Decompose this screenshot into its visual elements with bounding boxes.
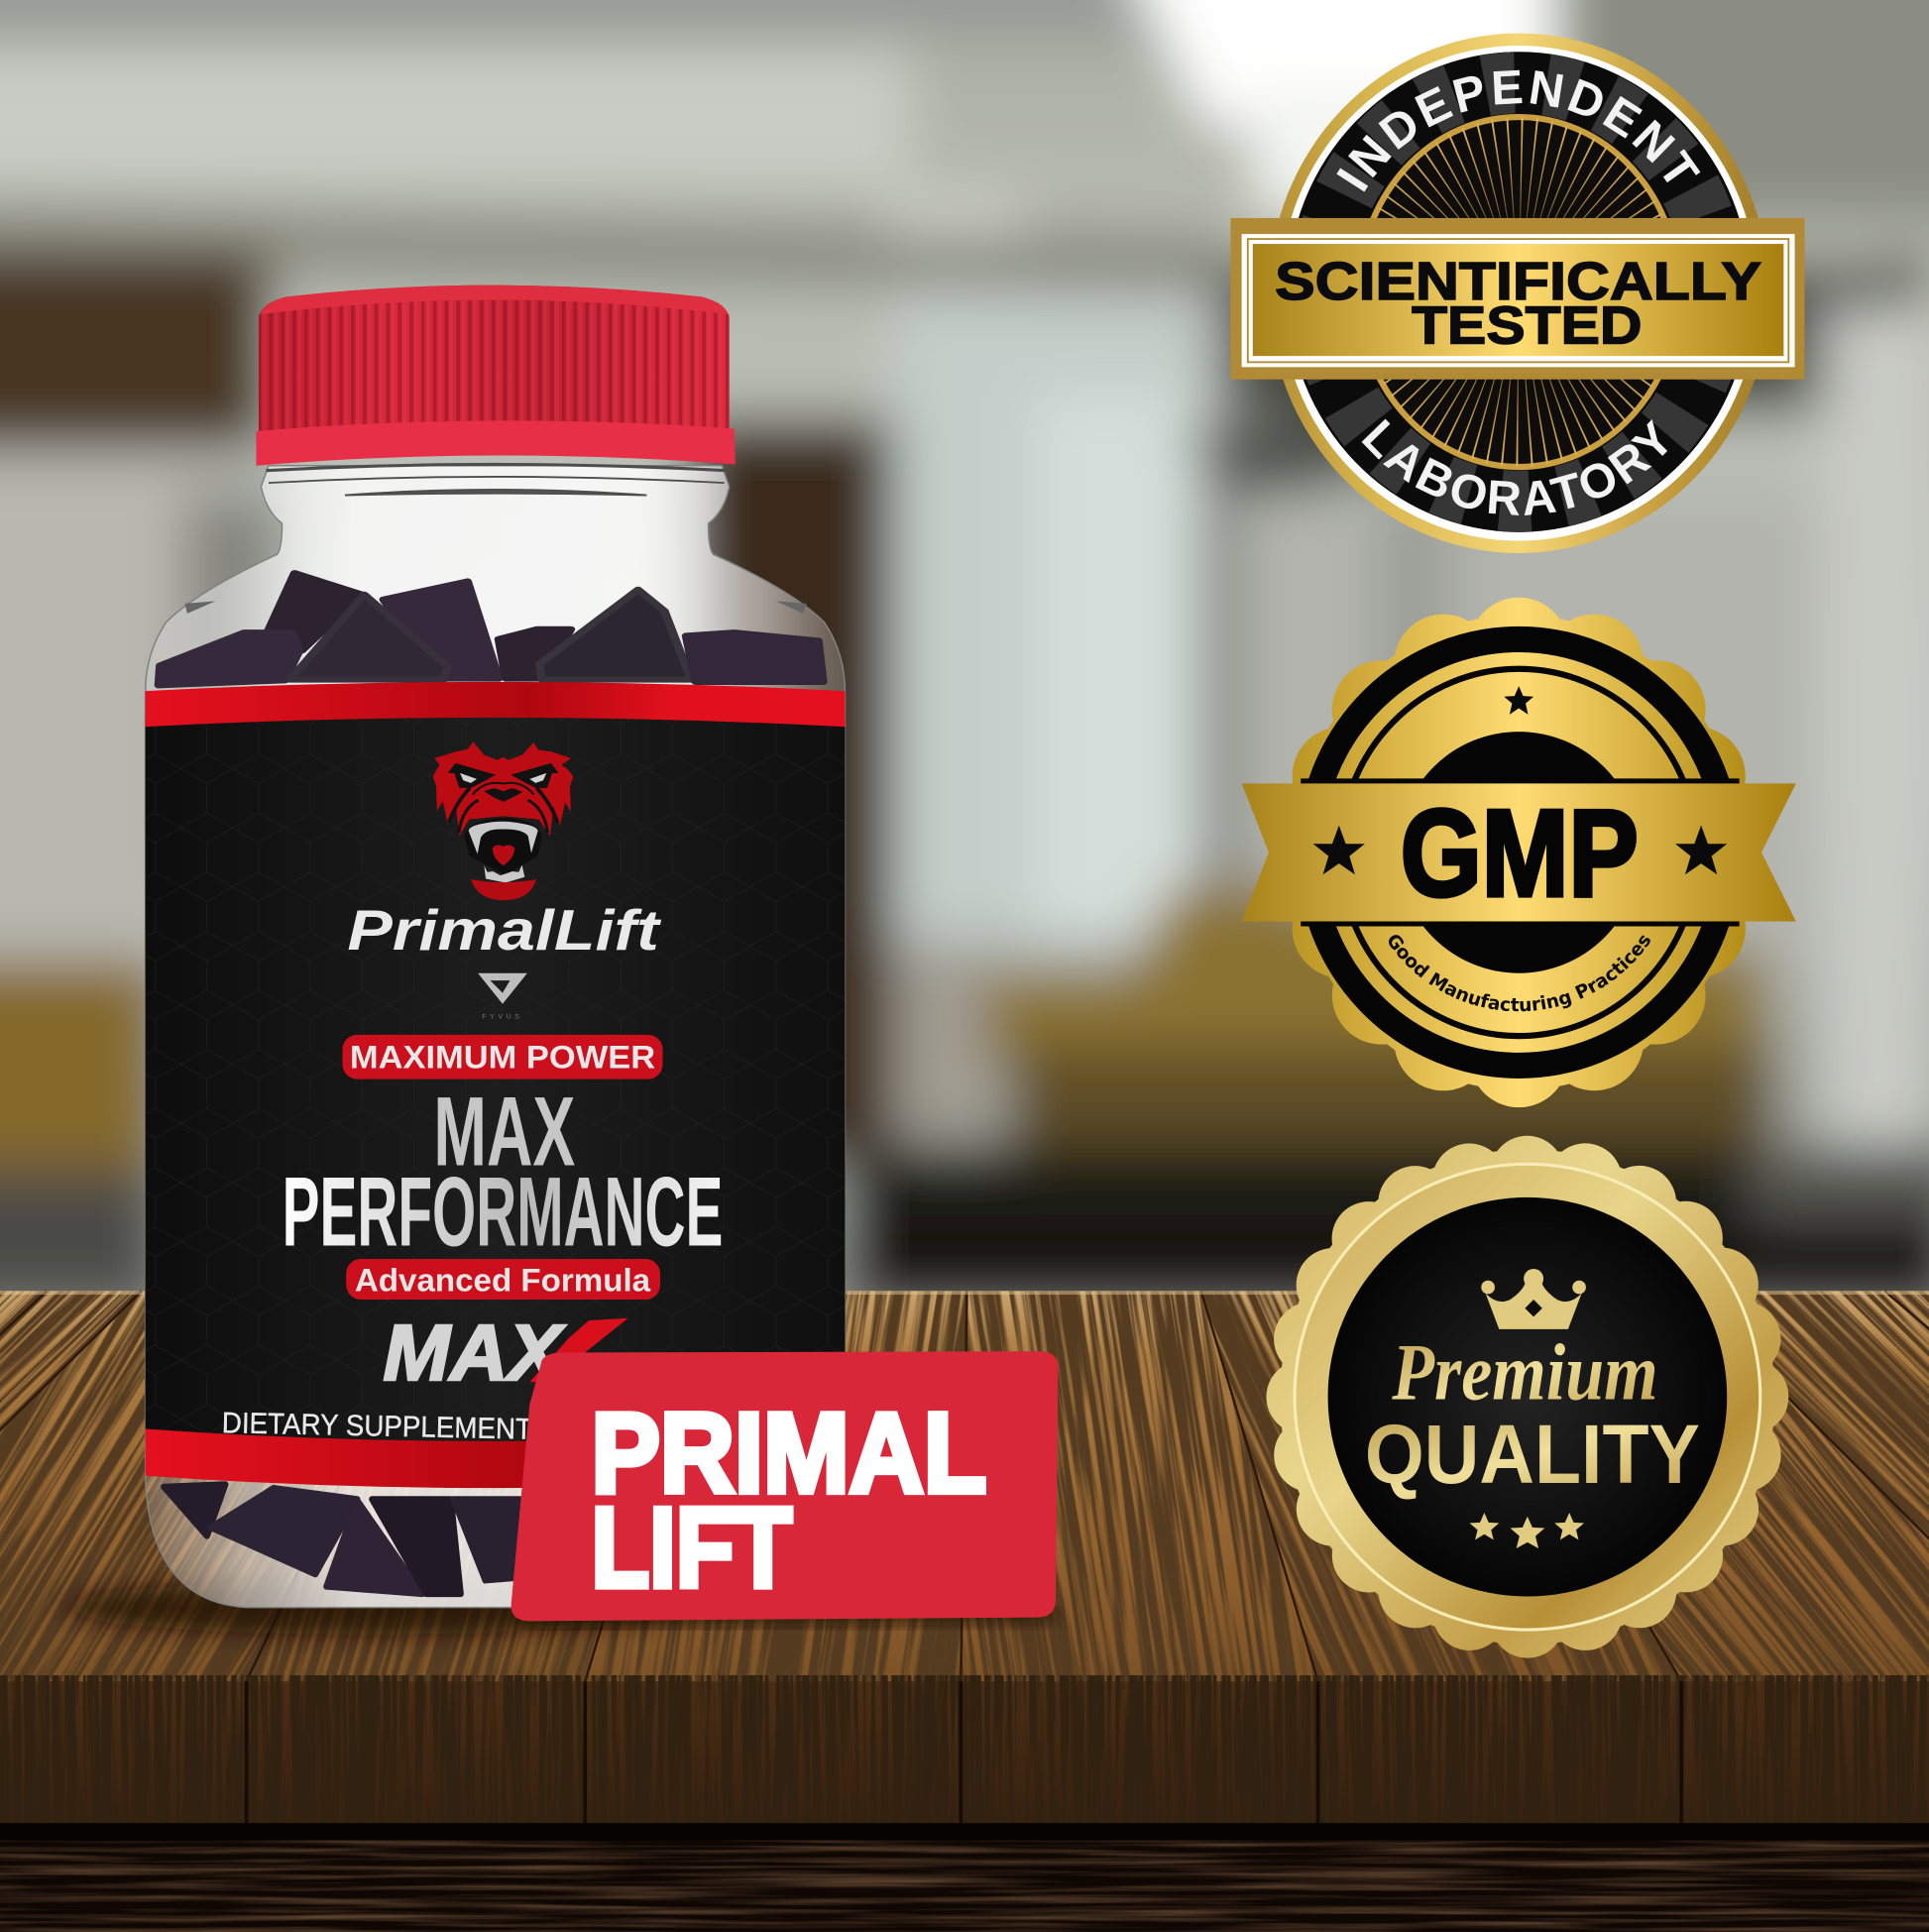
maker emblem bbox=[478, 973, 527, 1021]
curved text: good manufacturing practices: Good Manufacturing Practices bbox=[1389, 935, 1650, 1011]
ribbon bbox=[1242, 778, 1796, 926]
badge: scientifically tested bbox=[1230, 34, 1804, 553]
badge: premium quality bbox=[1280, 1149, 1775, 1645]
glass jar bbox=[146, 466, 845, 1608]
product title bbox=[283, 1078, 723, 1267]
gold banner bbox=[1230, 218, 1804, 380]
product title: PERFORMANCE bbox=[283, 1157, 723, 1267]
curved text: independent: INDEPENDENT bbox=[1336, 69, 1701, 192]
center black disc bbox=[1398, 732, 1640, 973]
tag shadow bbox=[517, 1608, 1057, 1629]
scalloped gold seal bbox=[1296, 615, 1742, 1090]
outer gold ring bbox=[1269, 34, 1768, 553]
gold ring bbox=[1295, 1164, 1760, 1630]
maximum power pill: MAXIMUM POWER bbox=[350, 1039, 655, 1075]
gorilla logo bbox=[433, 741, 573, 900]
gold banner: SCIENTIFICALLY bbox=[1275, 253, 1761, 311]
black rings bbox=[1309, 639, 1728, 1066]
blurred room background bbox=[0, 0, 1929, 1318]
product title: MAX bbox=[433, 1078, 575, 1188]
max logo: MAX bbox=[383, 1308, 566, 1397]
dietary supplement line: DIETARY SUPPLEMENT bbox=[222, 1407, 532, 1446]
premium script: Premium bbox=[1391, 1327, 1658, 1418]
gummies bottom bbox=[164, 1484, 523, 1594]
star: top bbox=[1504, 686, 1533, 715]
red primal lift tag: PRIMAL bbox=[591, 1391, 986, 1517]
product bottle bbox=[146, 285, 845, 1608]
scalloped gold seal bbox=[1280, 1149, 1775, 1645]
black segmented ring bbox=[1288, 52, 1751, 532]
quality: QUALITY bbox=[1365, 1408, 1700, 1501]
red primal lift tag bbox=[511, 1351, 1058, 1621]
red band top bbox=[146, 682, 845, 727]
advanced formula pill: Advanced Formula bbox=[355, 1262, 651, 1298]
neck glass reflections bbox=[184, 464, 807, 614]
inner sunburst bbox=[1359, 117, 1679, 467]
wooden table bbox=[0, 1281, 1929, 1932]
red band bottom bbox=[146, 1428, 845, 1488]
crown icon bbox=[1481, 1269, 1586, 1329]
curved text: laboratory: LABORATORY bbox=[1362, 418, 1667, 515]
ribbon: GMP bbox=[1401, 785, 1639, 922]
brand name: PrimalLift bbox=[347, 899, 661, 963]
badge: GMP bbox=[1241, 597, 1796, 1108]
black center bbox=[1328, 1197, 1727, 1596]
black label bbox=[146, 706, 845, 1453]
gold banner: TESTED bbox=[1412, 297, 1642, 356]
maker emblem: FYVUS bbox=[482, 1014, 523, 1021]
red cap bbox=[256, 285, 736, 466]
red primal lift tag: LIFT bbox=[591, 1486, 792, 1612]
bottle shadow on table bbox=[61, 1580, 677, 1635]
three stars bbox=[1469, 1513, 1584, 1548]
gummies top bbox=[159, 573, 823, 685]
